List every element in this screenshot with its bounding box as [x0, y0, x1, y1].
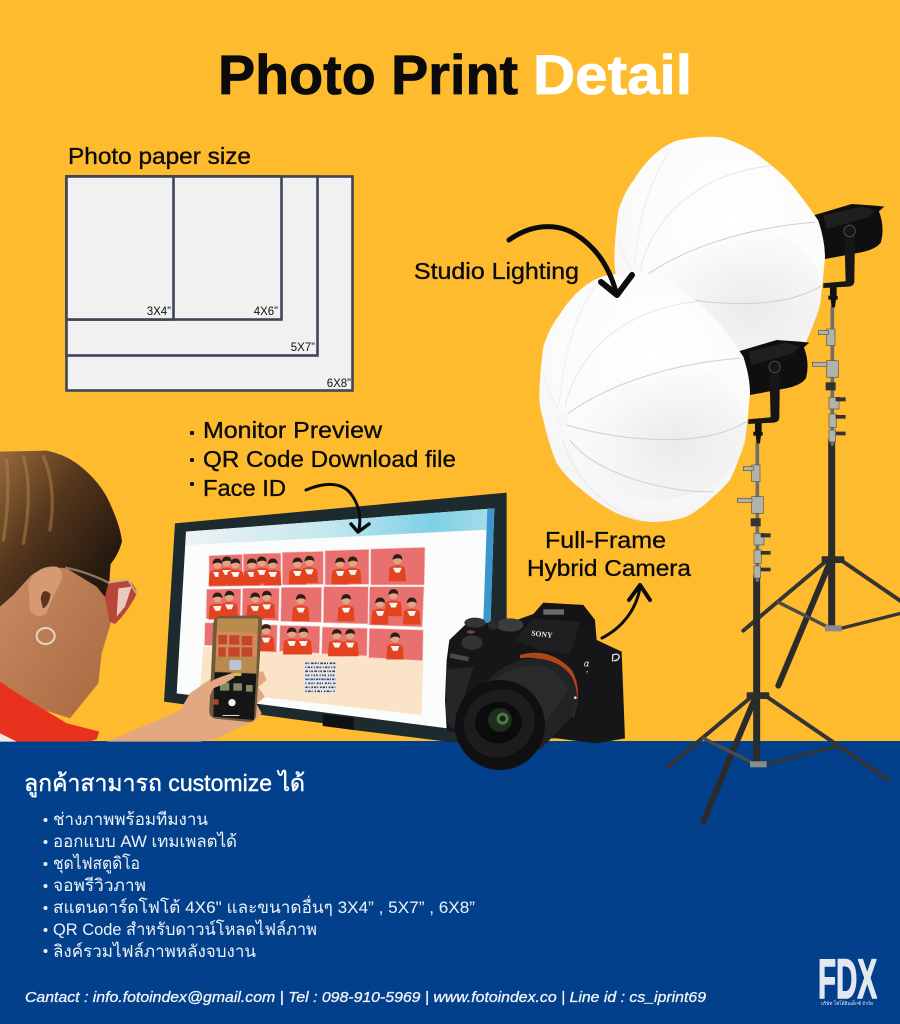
full-frame hybrid camera label: Hybrid Camera: [527, 555, 692, 581]
paper size diagram: [66, 176, 352, 390]
customize list: ออกแบบ AW เทมเพลตได้: [53, 831, 237, 851]
customize list: [44, 810, 475, 961]
phone: [209, 615, 262, 722]
monitor webcam tab: [323, 714, 354, 730]
person holding phone: [0, 451, 267, 742]
customize list: ช่างภาพพร้อมทีมงาน: [53, 810, 208, 829]
camera body: [445, 603, 625, 743]
earring: [37, 628, 55, 644]
FDX logo: บริษัท โฟโต้อินเด็กซ์ จำกัด: [821, 999, 873, 1007]
feature list: [190, 417, 456, 501]
front light on stand: [539, 273, 888, 822]
heading: photo paper size: Photo paper size: [68, 143, 251, 169]
orange lens mount: [520, 653, 578, 717]
monitor screen: [177, 508, 494, 728]
red shirt collar: [0, 682, 99, 742]
photo grid: [204, 547, 425, 661]
arm and hand: [107, 672, 267, 742]
customize list: QR Code สำหรับดาวน์โหลดไฟล์ภาพ: [53, 919, 317, 939]
title: [218, 43, 692, 106]
customize list: จอพรีวิวภาพ: [53, 876, 146, 895]
hair: [0, 451, 122, 607]
monitor: [164, 493, 507, 743]
size labels: 4X6”: [254, 306, 278, 318]
customize list: ชุดไฟสตูดิโอ: [53, 853, 140, 874]
size labels: [147, 306, 351, 390]
customize heading: ลูกค้าสามารถ customize ได้: [24, 770, 305, 798]
customize list: ลิงค์รวมไฟล์ภาพหลังจบงาน: [53, 941, 256, 961]
full-frame hybrid camera label: Full-Frame: [545, 527, 666, 553]
size labels: 6X8”: [327, 378, 351, 390]
arrow: studio lighting: [509, 227, 632, 295]
sony brand: SONY: [531, 629, 553, 640]
thumb: [197, 673, 235, 703]
size labels: 5X7”: [291, 342, 315, 354]
contact line: Cantact : info.fotoindex@gmail.com | Tel : 098-910-5969 | www.fotoindex.co | Line id : cs_iprint69: [25, 990, 706, 1006]
ear: [28, 567, 62, 616]
customize list: สแตนดาร์ดโฟโต้ 4X6" และขนาดอื่นๆ 3X4” , 5X7” , 6X8”: [53, 895, 475, 917]
feature list: Monitor Preview: [203, 417, 383, 443]
studio lighting label: Studio Lighting: [414, 258, 579, 284]
feature list: Face ID: [203, 475, 286, 501]
people in photos: [209, 554, 420, 660]
panel: photo paper size: [66, 143, 352, 390]
neck and face: [0, 565, 111, 718]
full-frame hybrid camera label: [527, 527, 692, 581]
dials: [464, 618, 486, 628]
camera: [439, 603, 625, 786]
title: Detail: [533, 43, 692, 106]
title: Photo Print: [218, 43, 518, 106]
camera: 7: [586, 670, 589, 675]
back light on stand: [614, 137, 900, 686]
QR code: [304, 660, 337, 695]
arrow: camera: [602, 585, 650, 638]
alpha badge: α: [584, 660, 590, 670]
peach lower section: [200, 647, 423, 715]
lens front: [439, 664, 561, 786]
monitor frame: [164, 493, 507, 743]
arrow: face id to monitor: [306, 484, 369, 532]
glasses: [65, 568, 137, 624]
blue footer band: [0, 741, 900, 1024]
feature list: QR Code Download file: [203, 446, 456, 472]
size labels: 3X4”: [147, 306, 171, 318]
viewfinder: [515, 618, 580, 655]
lens barrel: [473, 658, 577, 750]
